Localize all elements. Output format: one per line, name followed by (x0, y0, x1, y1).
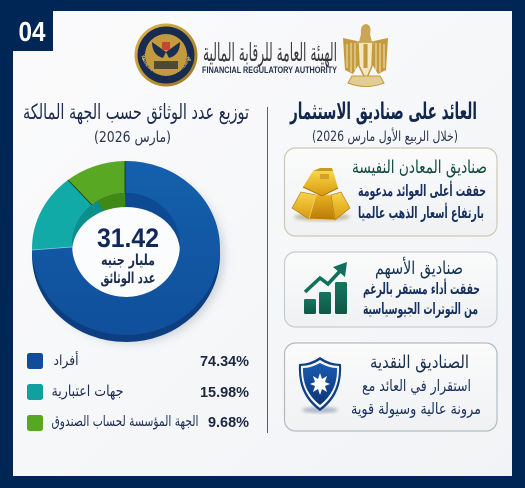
text: money market (351, 352, 481, 419)
page number badge (13, 11, 53, 51)
subheading: date: (مارس 2026) (94, 128, 171, 146)
legend row: individuals: 74.34% (200, 353, 249, 370)
legend row: individuals: أفراد (54, 351, 79, 369)
text: money market: استقرار في العائد مع (362, 377, 471, 396)
panel: precious metals funds (284, 148, 497, 236)
donut centre value: 31.42 (97, 223, 159, 253)
icon: shield (299, 357, 341, 413)
page number badge: 04 (18, 16, 46, 47)
donut centre value: عدد الوثائق (100, 269, 156, 287)
donut chart (32, 161, 224, 343)
legend row: founder: الجهة المؤسسة لحساب الصندوق (52, 414, 198, 430)
subheading: fund returns period: (خلال الربيع الأول مارس 2026) (312, 127, 458, 145)
text: الهيئة العامة للرقابة المالية (203, 38, 337, 68)
text: precious metals (352, 157, 487, 222)
logo: authority name (202, 38, 337, 76)
logo: FRA seal: FINANCIAL REGULATORY AUTHORITY (141, 56, 190, 76)
heading: documents distribution: توزيع عدد الوثائق حسب الجهة المالكة (23, 100, 249, 124)
panel: equity funds (284, 252, 497, 327)
legend row: institutions (27, 382, 249, 401)
text: money market: مرونة عالية وسيولة قوية (351, 400, 481, 419)
icon: rising chart (304, 262, 347, 314)
text: equity (363, 257, 480, 318)
logo: FRA seal (134, 24, 198, 86)
legend (27, 351, 249, 431)
text: equity: صناديق الأسهم (375, 257, 463, 279)
donut centre value (97, 223, 159, 287)
text: precious metals: صناديق المعادن النفيسة (352, 157, 487, 178)
icon: gold bars (292, 168, 350, 221)
legend row: individuals (27, 351, 249, 370)
panel: money market funds (284, 343, 497, 431)
donut centre value: مليار جنيه (101, 251, 155, 269)
logo: eagle emblem (343, 24, 388, 86)
legend row: institutions: 15.98% (200, 384, 249, 401)
text: money market: الصناديق النقدية (370, 352, 469, 373)
divider (267, 107, 268, 433)
legend row: institutions: جهات اعتبارية (52, 382, 124, 400)
legend row: founder: 9.68% (208, 414, 249, 431)
logo: authority name: FINANCIAL REGULATORY AUTHORITY (202, 65, 337, 76)
